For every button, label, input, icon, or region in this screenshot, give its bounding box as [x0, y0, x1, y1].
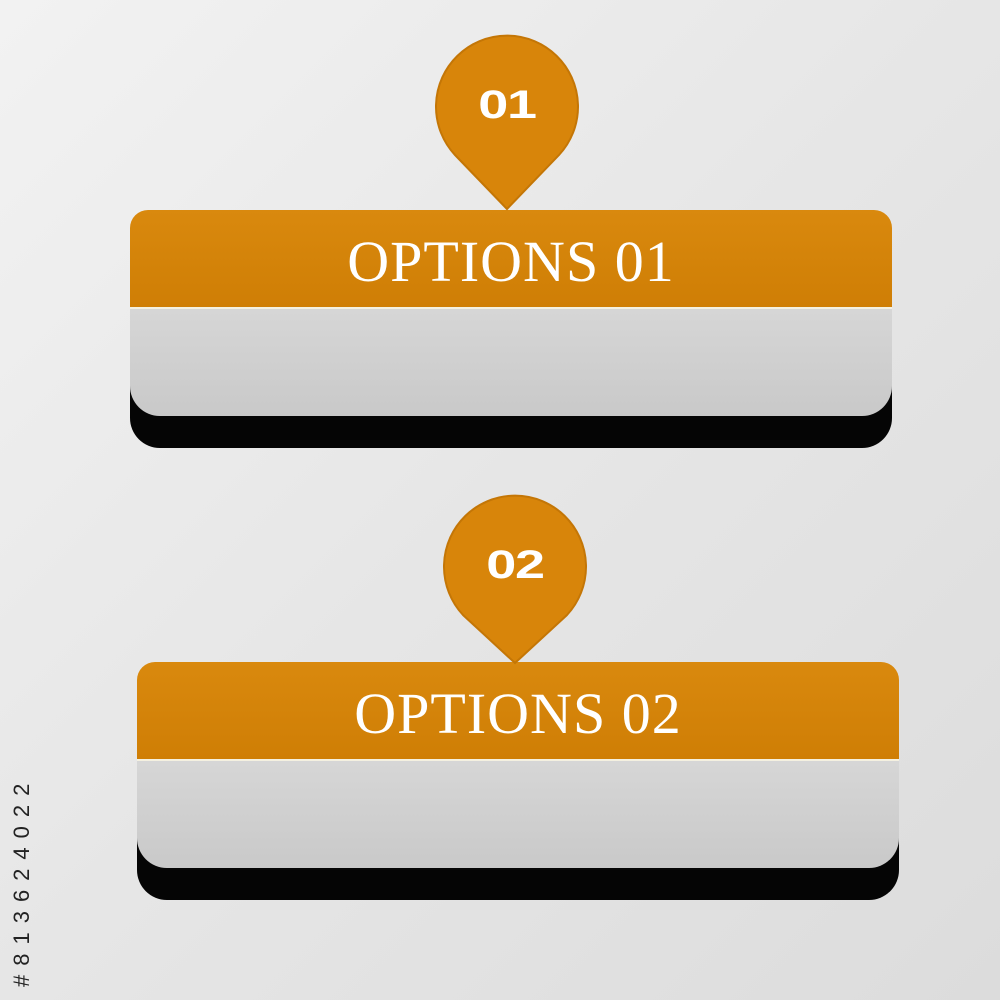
card: options 01 [130, 210, 892, 448]
gray body [130, 307, 892, 416]
pin: 01 [435, 34, 579, 210]
card: options 02 [137, 662, 899, 900]
pin: 02: 02 [486, 543, 544, 587]
shadow [130, 360, 892, 448]
pin: 02 [443, 494, 587, 664]
heading bar [130, 210, 892, 307]
heading bar: OPTIONS 02 [354, 681, 682, 746]
heading bar [137, 662, 899, 759]
stock id text: #813624022 [9, 775, 34, 987]
gray body [137, 759, 899, 868]
pin: 01: 01 [478, 83, 536, 127]
heading bar: OPTIONS 01 [347, 229, 675, 294]
shadow [137, 812, 899, 900]
